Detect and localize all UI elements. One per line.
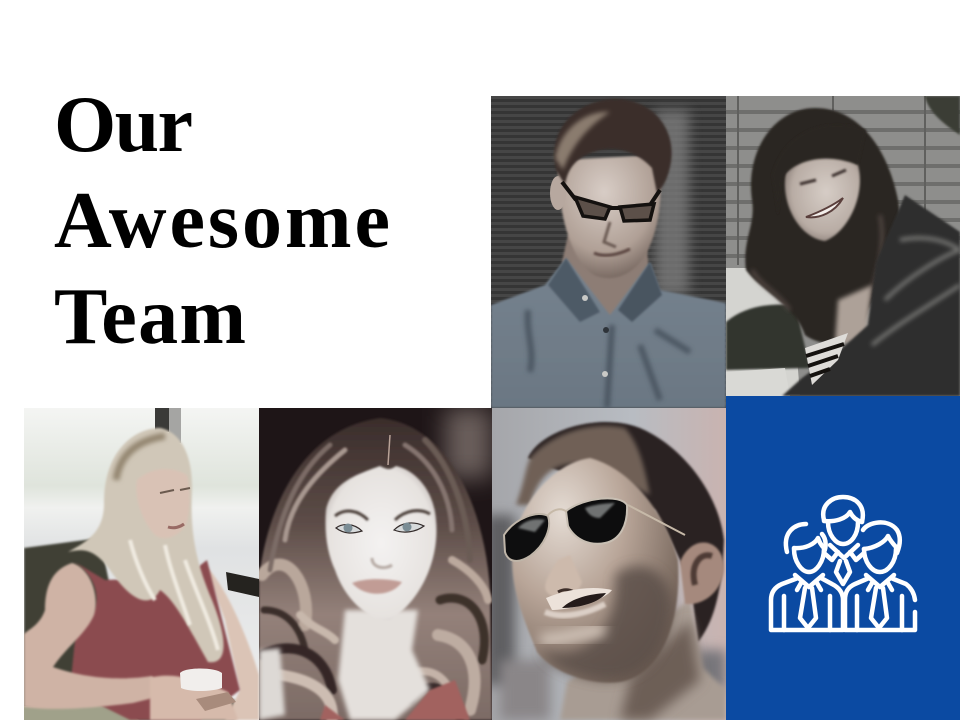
title xyxy=(54,81,390,361)
window frame xyxy=(155,408,169,432)
ear xyxy=(680,542,724,604)
face xyxy=(558,155,661,278)
chin highlight xyxy=(540,630,605,640)
dark hair xyxy=(528,422,724,642)
curls xyxy=(262,440,488,720)
arm xyxy=(259,648,285,720)
right arm xyxy=(209,570,259,720)
face xyxy=(325,466,437,620)
photo: man with glasses xyxy=(491,96,726,408)
nose xyxy=(545,555,582,597)
hair xyxy=(259,418,492,720)
face xyxy=(785,152,860,241)
title: Awesome xyxy=(54,177,390,265)
face xyxy=(512,458,679,683)
smile xyxy=(806,198,843,217)
panel: blue icon tile xyxy=(726,396,960,720)
shirt xyxy=(491,258,726,408)
plant xyxy=(925,96,960,135)
nose xyxy=(372,558,392,568)
dress xyxy=(68,558,240,720)
window blinds xyxy=(726,112,960,256)
left arm xyxy=(24,563,165,709)
hair xyxy=(554,99,672,193)
sofa xyxy=(24,538,235,720)
striped top xyxy=(805,333,848,385)
photo: woman in leather jacket xyxy=(726,96,960,396)
neck and chest xyxy=(338,610,430,720)
nose and mouth xyxy=(604,222,616,247)
part line xyxy=(388,435,390,465)
face xyxy=(138,470,188,536)
title: Our xyxy=(54,81,193,169)
icon: team of three people xyxy=(771,497,915,630)
mouth xyxy=(546,588,612,610)
photo: woman with curly hair xyxy=(259,408,492,720)
chest xyxy=(835,285,872,345)
hair xyxy=(68,428,224,662)
stubble xyxy=(540,566,672,680)
photo: blonde woman with coffee xyxy=(24,408,259,720)
left person xyxy=(786,524,826,552)
car xyxy=(726,268,800,395)
sunglasses xyxy=(504,498,685,561)
lips xyxy=(352,579,402,594)
hair xyxy=(745,108,899,343)
ear xyxy=(550,176,563,210)
jacket xyxy=(782,195,960,396)
glasses xyxy=(562,182,660,208)
title: Team xyxy=(54,273,246,361)
coffee cup xyxy=(180,668,222,691)
centre person xyxy=(823,497,863,522)
hands xyxy=(150,676,238,720)
brows xyxy=(335,511,430,520)
eyes xyxy=(336,522,424,533)
right person xyxy=(863,522,900,553)
neck xyxy=(560,600,726,720)
photo: laughing man in sunglasses xyxy=(485,408,726,720)
neck xyxy=(562,235,652,322)
